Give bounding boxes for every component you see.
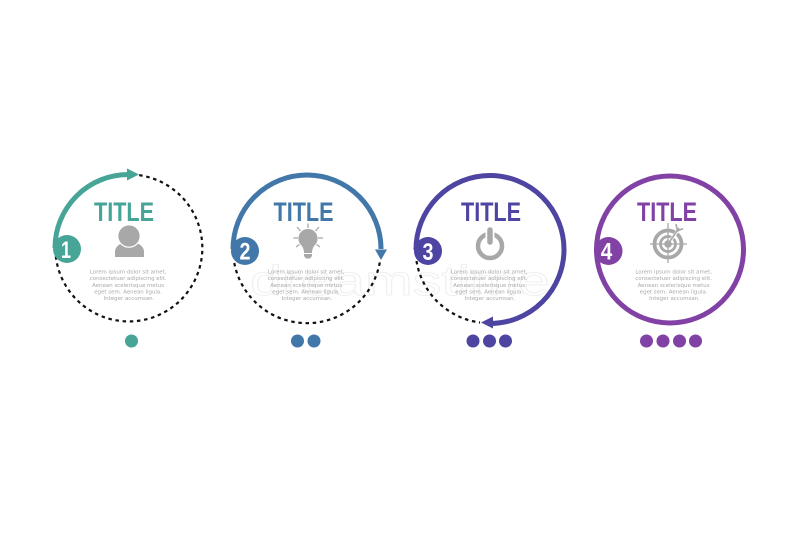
panel: step 4 bbox=[594, 176, 744, 348]
body text 2: eget sem. Aenean ligula. bbox=[272, 290, 340, 296]
panel: step 2 bbox=[231, 175, 387, 348]
step dots 3 bbox=[466, 334, 512, 348]
body text 1: consectetuer adipiscing elit. bbox=[90, 276, 167, 282]
title 2: TITLE bbox=[274, 197, 334, 227]
body text 4: eget sem. Aenean ligula. bbox=[640, 290, 708, 296]
panel: step 3 bbox=[414, 176, 564, 348]
body text 2: Lorem ipsum dolor sit amet, bbox=[268, 270, 345, 276]
number badge 1: 1 bbox=[61, 237, 71, 264]
body text 2: Integer accumsan. bbox=[282, 296, 333, 302]
number badge 3: 3 bbox=[422, 239, 434, 266]
number badge 1 bbox=[53, 235, 81, 264]
body text 3: Aenean scelerisque metus bbox=[453, 283, 525, 289]
step dots 2 bbox=[291, 334, 320, 348]
body text 1: Lorem ipsum dolor sit amet, bbox=[90, 270, 167, 276]
body text 1: Aenean scelerisque metus bbox=[92, 283, 164, 289]
body text 4: Aenean scelerisque metus bbox=[638, 283, 710, 289]
body text 1: Integer accumsan. bbox=[104, 296, 155, 302]
title 3: TITLE bbox=[461, 197, 521, 227]
arrow arc 1 bbox=[55, 168, 139, 248]
arrow arc 3 bbox=[416, 176, 564, 328]
step dots 1 bbox=[125, 334, 138, 348]
panel: step 1 bbox=[53, 168, 202, 348]
icon: person bbox=[115, 225, 144, 257]
number badge 3 bbox=[414, 237, 442, 266]
number badge 4 bbox=[594, 237, 622, 266]
number badge 4: 4 bbox=[601, 238, 613, 266]
arrow arc 2 bbox=[233, 175, 387, 260]
body text 3: eget sem. Aenean ligula. bbox=[455, 290, 523, 296]
step dots 4 bbox=[640, 334, 702, 348]
icon: power bbox=[478, 228, 502, 258]
body text 4: consectetuer adipiscing elit. bbox=[635, 276, 712, 282]
body text 1: eget sem. Aenean ligula. bbox=[94, 290, 162, 296]
title 1: TITLE bbox=[94, 197, 154, 227]
watermark: dreamstime bbox=[250, 257, 550, 304]
icon: light bulb bbox=[294, 224, 323, 258]
body text 2: Aenean scelerisque metus bbox=[270, 283, 342, 289]
body text 3: Lorem ipsum dolor sit amet, bbox=[451, 270, 528, 276]
body text 3: Integer accumsan. bbox=[465, 296, 516, 302]
body text 4: Integer accumsan. bbox=[649, 296, 700, 302]
number badge 2 bbox=[231, 237, 259, 266]
dashed ring 1 bbox=[56, 174, 202, 321]
icon: target bbox=[650, 223, 687, 263]
body text 4: Lorem ipsum dolor sit amet, bbox=[635, 270, 712, 276]
dashed ring 2 bbox=[234, 260, 380, 323]
full ring 4 bbox=[596, 176, 744, 323]
dashed ring 3 bbox=[416, 261, 480, 322]
body text 3: consectetuer adipiscing elit. bbox=[451, 276, 528, 282]
title 4: TITLE bbox=[637, 197, 697, 227]
body text 2: consectetuer adipiscing elit. bbox=[268, 276, 345, 282]
number badge 2: 2 bbox=[240, 238, 250, 266]
